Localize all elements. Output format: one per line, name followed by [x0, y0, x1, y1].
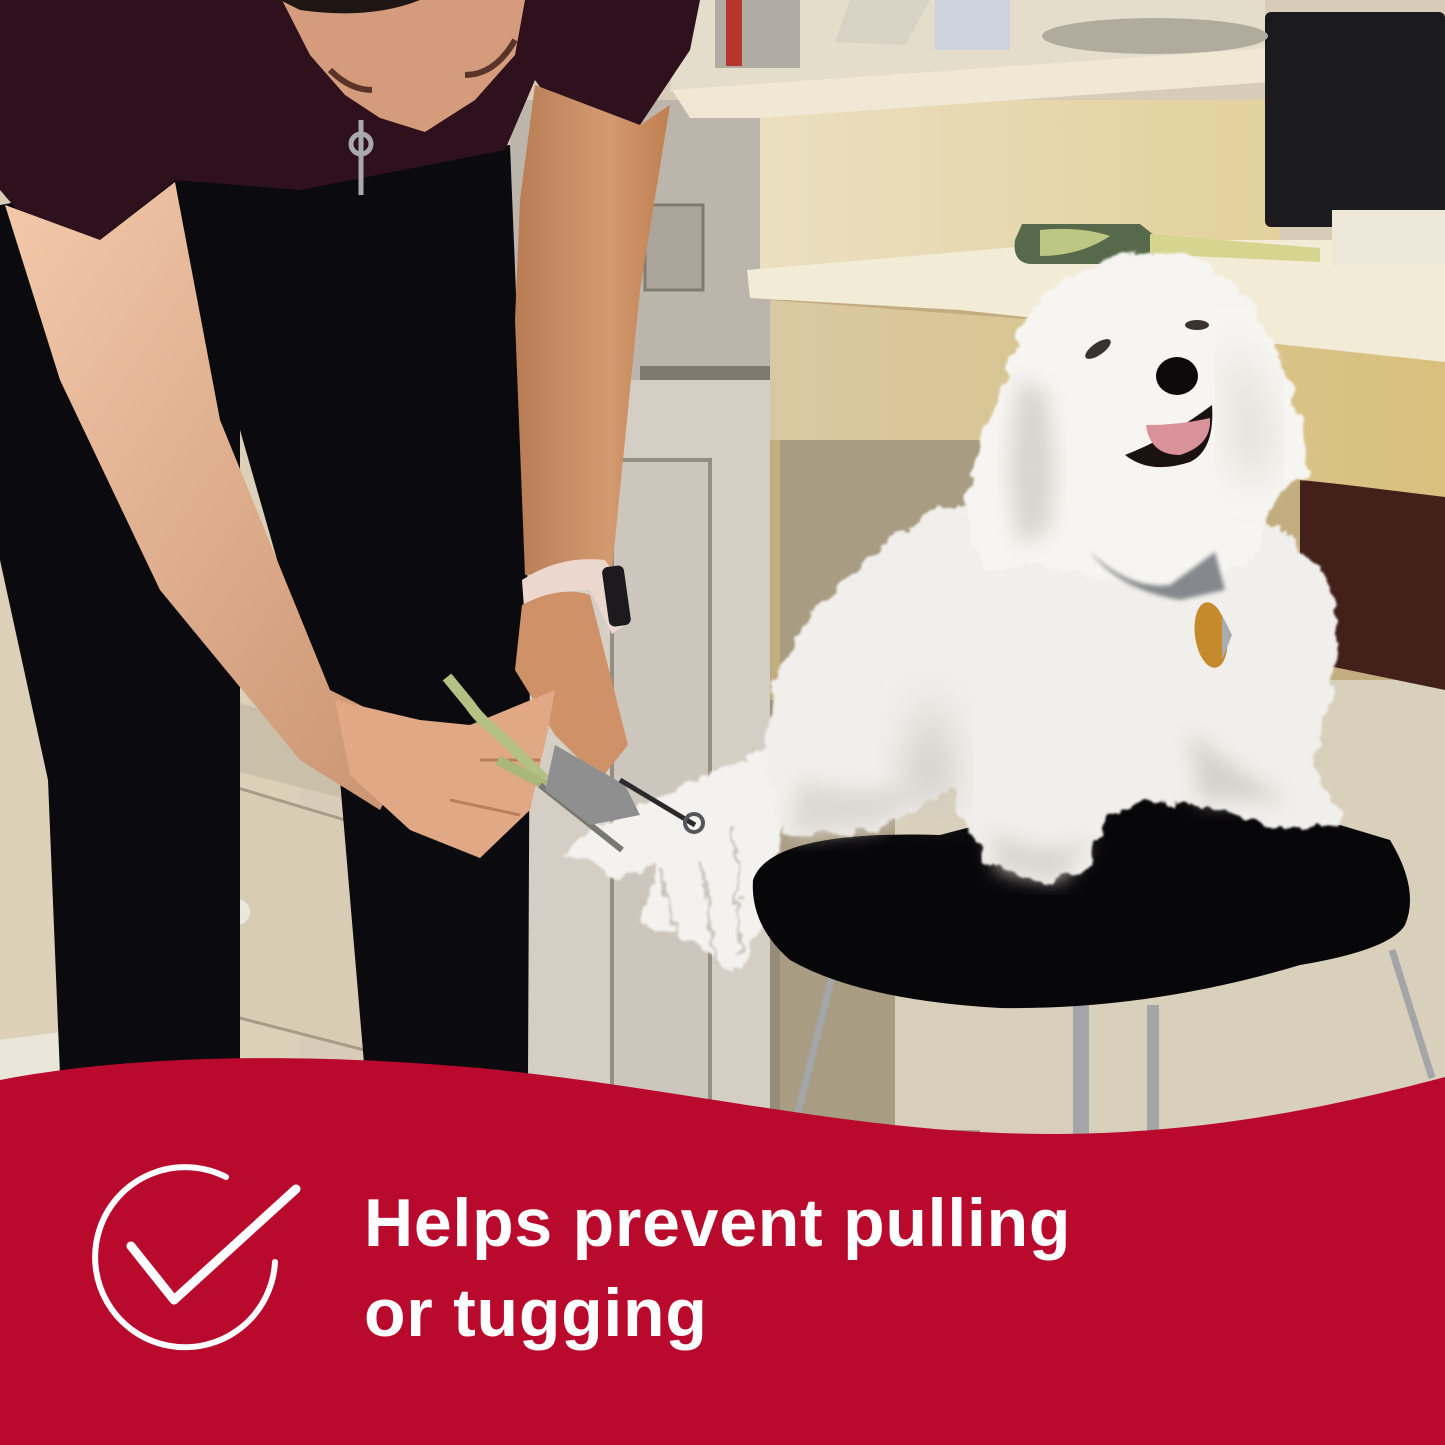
- dog ear shading: [1010, 380, 1054, 545]
- stool legs: [795, 950, 1432, 1135]
- dog muzzle shading: [1230, 340, 1268, 480]
- groomer: neck and face: [280, 0, 525, 132]
- dog tag: [1191, 600, 1232, 670]
- dog eyes: [1082, 320, 1209, 363]
- dog shading: [790, 690, 1290, 880]
- icon: check mark in circle: [95, 1167, 296, 1347]
- groomer: hands: [335, 592, 628, 858]
- groomer: right arm: [5, 182, 420, 810]
- dog: [765, 251, 1342, 882]
- dog head: [965, 251, 1310, 585]
- pendant key necklace: [351, 120, 371, 195]
- headline: Helps prevent pulling: [364, 1185, 1071, 1261]
- icon: slicker brush on counter: [1015, 224, 1320, 264]
- groomer: shirt: [0, 0, 700, 240]
- left drawers: [0, 700, 372, 1080]
- headline: [364, 1185, 1071, 1351]
- smart watch: [522, 559, 632, 634]
- dog body: [765, 495, 1342, 882]
- headline: or tugging: [364, 1275, 708, 1351]
- dog collar: [1090, 552, 1225, 600]
- red wave banner: [0, 1058, 1445, 1445]
- dog mouth: [1125, 405, 1212, 467]
- stool seat: [753, 785, 1410, 1008]
- groomer: trousers: [0, 145, 530, 1075]
- groomer: left arm: [515, 85, 670, 575]
- dog tail fur: [565, 745, 785, 978]
- metal comb and scissor tool: [447, 677, 703, 850]
- counter top with objects: [670, 0, 1445, 362]
- dog nose: [1156, 357, 1198, 395]
